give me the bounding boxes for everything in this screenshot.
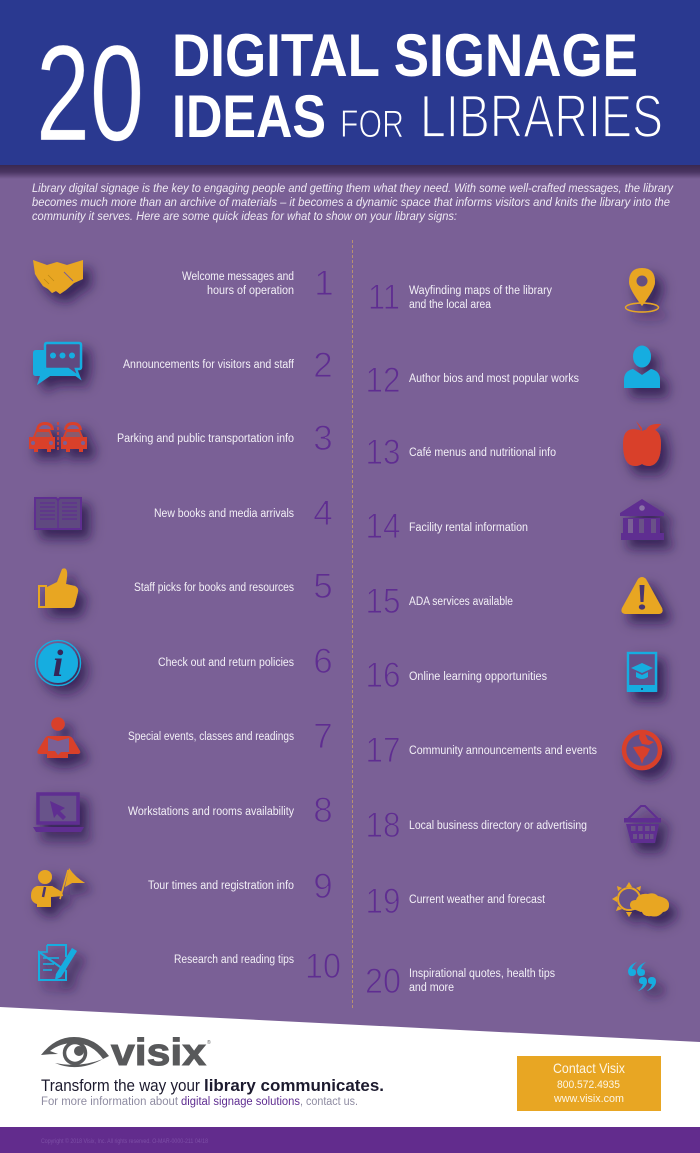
item 17 <box>366 731 660 770</box>
icon: warning triangle <box>621 577 663 614</box>
item 10: 10 <box>305 947 341 986</box>
item 15: ADA services available <box>409 596 513 608</box>
item 15: 15 <box>366 582 400 621</box>
item 11: and the local area <box>409 299 492 311</box>
item 6: 6 <box>313 642 333 681</box>
item 12: Author bios and most popular works <box>409 373 579 385</box>
item 4: New books and media arrivals <box>154 508 294 520</box>
icon: sun and cloud <box>612 882 669 917</box>
icon: tablet with mortarboard <box>627 653 657 692</box>
subline: digital signage solutions <box>181 1096 300 1108</box>
item 13: 13 <box>366 433 400 472</box>
title: DIGITAL SIGNAGE <box>172 22 638 89</box>
contact box: Contact Visix <box>553 1060 625 1076</box>
contact box: 800.572.4935 <box>557 1079 620 1091</box>
panel: left column ideas 1-10 <box>29 260 341 986</box>
contact box <box>517 1056 661 1111</box>
intro text: Library digital signage is the key to engaging people and getting them what they need. With some well-crafted messages, the library <box>32 183 674 195</box>
icon: globe <box>624 732 660 768</box>
item 15 <box>366 577 663 621</box>
item 1: hours of operation <box>207 285 294 297</box>
icon: bank building <box>620 499 664 540</box>
subline: , contact us. <box>300 1096 358 1108</box>
item 2: Announcements for visitors and staff <box>123 359 295 371</box>
tagline: library communicates. <box>204 1077 384 1095</box>
footer panel <box>0 1007 700 1128</box>
bottom copyright bar <box>0 1127 700 1153</box>
icon: laptop <box>33 794 84 832</box>
icon: tour guide with flag <box>31 868 85 907</box>
item 11: 11 <box>368 278 400 317</box>
icon: apple <box>623 421 661 466</box>
item 20: 20 <box>365 962 401 1001</box>
item 10: Research and reading tips <box>174 954 294 966</box>
item 7: 7 <box>313 717 333 756</box>
item 3: 3 <box>313 419 333 458</box>
logo: visix <box>41 1032 211 1074</box>
icon: document and pencil <box>39 945 77 980</box>
item 14: Facility rental information <box>409 522 528 534</box>
icon: quotation marks <box>628 962 656 991</box>
icon: information <box>36 640 80 686</box>
icon: person <box>624 346 660 388</box>
item 13: Café menus and nutritional info <box>409 447 556 459</box>
item 17: Community announcements and events <box>409 745 597 757</box>
item 11: Wayfinding maps of the library <box>409 285 552 297</box>
item 14 <box>366 499 664 546</box>
item 18: Local business directory or advertising <box>409 820 587 832</box>
icon: information: i <box>53 643 64 685</box>
tagline: Transform the way your <box>41 1077 200 1095</box>
item 6: Check out and return policies <box>158 657 294 669</box>
icon: thumbs up <box>39 568 78 608</box>
item 18: 18 <box>366 806 400 845</box>
item 11 <box>368 268 658 317</box>
subline <box>41 1096 358 1108</box>
item 16 <box>366 653 657 695</box>
panel: right column ideas 11-20 <box>365 268 669 1001</box>
item 20: Inspirational quotes, health tips <box>409 968 555 980</box>
item 3 <box>29 419 333 458</box>
item 7: Special events, classes and readings <box>128 731 294 743</box>
item 19 <box>366 882 669 921</box>
item 19: 19 <box>366 882 400 921</box>
item 16: Online learning opportunities <box>409 671 547 683</box>
item 9: Tour times and registration info <box>148 880 294 892</box>
item 19: Current weather and forecast <box>409 894 546 906</box>
title: 20 <box>36 17 144 169</box>
item 9: 9 <box>313 867 333 906</box>
item 13 <box>366 421 661 472</box>
item 10 <box>39 945 341 986</box>
item 7 <box>37 717 333 758</box>
item 20 <box>365 962 656 1001</box>
icon: open book <box>35 498 81 529</box>
item 1: Welcome messages and <box>182 271 294 283</box>
tagline <box>41 1077 384 1095</box>
icon: map pin <box>626 268 658 312</box>
intro text: community it serves. Here are some quick ideas for what to show on your library signs: <box>32 211 457 223</box>
title: FOR <box>340 103 404 146</box>
logo: visix: visix <box>111 1032 206 1074</box>
item 12: 12 <box>366 361 400 400</box>
intro text: becomes much more than an archive of materials – it becomes a dynamic space that informs visitors and knits the library into the <box>32 197 670 209</box>
item 3: Parking and public transportation info <box>117 433 294 445</box>
item 5: 5 <box>313 567 333 606</box>
bottom copyright bar: Copyright © 2018 Visix, Inc. All rights reserved. O-MAR-0000-211 04/18 <box>41 1138 209 1145</box>
icon: shopping basket <box>624 806 661 843</box>
item 1: 1 <box>314 264 334 303</box>
subline: For more information about <box>41 1096 179 1108</box>
icon: handshake <box>33 260 83 294</box>
item 1 <box>33 260 334 303</box>
item 16: 16 <box>366 656 400 695</box>
item 20: and more <box>409 982 454 994</box>
item 8: 8 <box>313 791 333 830</box>
item 8 <box>33 791 333 832</box>
item 6 <box>36 640 333 686</box>
header band <box>0 0 700 179</box>
logo: visix: ® <box>207 1039 211 1046</box>
title: IDEAS <box>172 83 326 150</box>
item 14: 14 <box>366 507 400 546</box>
intro text <box>32 183 674 223</box>
item 4: 4 <box>313 494 333 533</box>
title <box>36 17 663 169</box>
item 8: Workstations and rooms availability <box>128 806 294 818</box>
item 2: 2 <box>313 346 333 385</box>
item 5 <box>39 567 333 608</box>
icon: cars <box>29 422 87 452</box>
item 18 <box>366 806 661 845</box>
item 5: Staff picks for books and resources <box>134 582 294 594</box>
item 12 <box>366 346 660 400</box>
item 9 <box>31 867 333 907</box>
item 4 <box>35 494 333 533</box>
item 2 <box>33 343 333 385</box>
item 17: 17 <box>366 731 400 770</box>
contact box: www.visix.com <box>553 1093 624 1105</box>
icon: person reading <box>37 717 80 758</box>
icon: chat bubbles <box>33 343 81 385</box>
